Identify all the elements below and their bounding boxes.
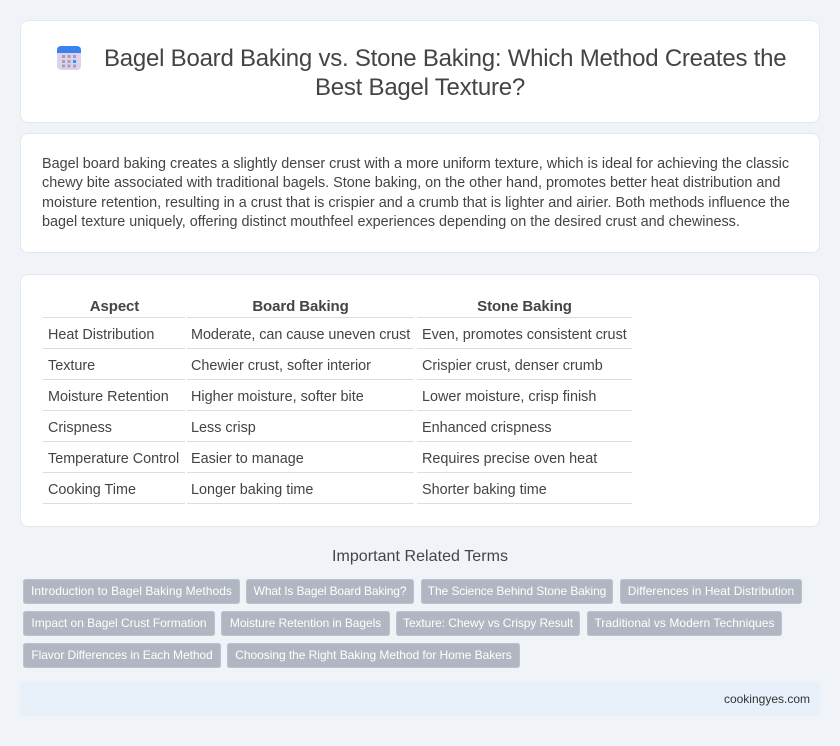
title: Best Bagel Texture? [315, 74, 525, 101]
related term tags: Texture: Chewy vs Crispy Result [403, 616, 573, 630]
comparison table: Temperature Control [48, 451, 179, 467]
footer bar [20, 682, 820, 716]
related term tags: Impact on Bagel Crust Formation [31, 616, 207, 630]
intro text: moisture retention, resulting in a crust that is crispier and a crumb that is lighter and airier. Both methods influence the [42, 195, 790, 211]
intro text: bagel texture uniquely, offering distinct mouthfeel experiences depending on the desired crust and chewiness. [42, 214, 740, 230]
icon: calendar [57, 46, 81, 70]
intro text [42, 156, 790, 230]
comparison table: Higher moisture, softer bite [191, 389, 364, 405]
comparison table: Heat Distribution [48, 327, 154, 343]
related term tags: Differences in Heat Distribution [628, 584, 794, 598]
comparison table: Enhanced crispness [422, 420, 552, 436]
intro text: Bagel board baking creates a slightly denser crust with a more uniform texture, which is ideal for achieving the classic [42, 156, 789, 172]
comparison table: Board Baking [252, 298, 349, 315]
related term tags: Introduction to Bagel Baking Methods [31, 584, 232, 598]
comparison table: Requires precise oven heat [422, 451, 597, 467]
panel: comparison table card [20, 274, 820, 527]
panel: title card [20, 20, 820, 123]
related term tags: Traditional vs Modern Techniques [594, 616, 775, 630]
heading: related terms: Important Related Terms [332, 548, 508, 565]
comparison table: Moderate, can cause uneven crust [191, 327, 410, 343]
comparison table: Shorter baking time [422, 482, 547, 498]
comparison table: Cooking Time [48, 482, 136, 498]
comparison table: Longer baking time [191, 482, 313, 498]
related term tags: What Is Bagel Board Baking? [254, 584, 406, 598]
comparison table: Less crisp [191, 420, 256, 436]
intro text: chewy bite associated with traditional bagels. Stone baking, on the other hand, promotes better heat distribution and [42, 175, 780, 191]
related term tags [23, 579, 802, 668]
comparison table: Moisture Retention [48, 389, 169, 405]
title [104, 45, 786, 101]
title: Bagel Board Baking vs. Stone Baking: Which Method Creates the [104, 45, 786, 72]
comparison table: Aspect [90, 298, 139, 315]
comparison table [43, 298, 632, 504]
footer bar: cookingyes.com [724, 692, 810, 706]
comparison table: Even, promotes consistent crust [422, 327, 627, 343]
comparison table: Crispier crust, denser crumb [422, 358, 603, 374]
related term tags: Flavor Differences in Each Method [31, 648, 213, 662]
related term tags: The Science Behind Stone Baking [428, 584, 606, 598]
related term tags: Choosing the Right Baking Method for Home Bakers [235, 648, 512, 662]
comparison table: Crispness [48, 420, 112, 436]
comparison table: Texture [48, 358, 95, 374]
panel: intro card [20, 133, 820, 253]
comparison table: Easier to manage [191, 451, 304, 467]
comparison table: Chewier crust, softer interior [191, 358, 371, 374]
comparison table: Stone Baking [477, 298, 572, 315]
comparison table: Lower moisture, crisp finish [422, 389, 596, 405]
related term tags: Moisture Retention in Bagels [230, 616, 381, 630]
